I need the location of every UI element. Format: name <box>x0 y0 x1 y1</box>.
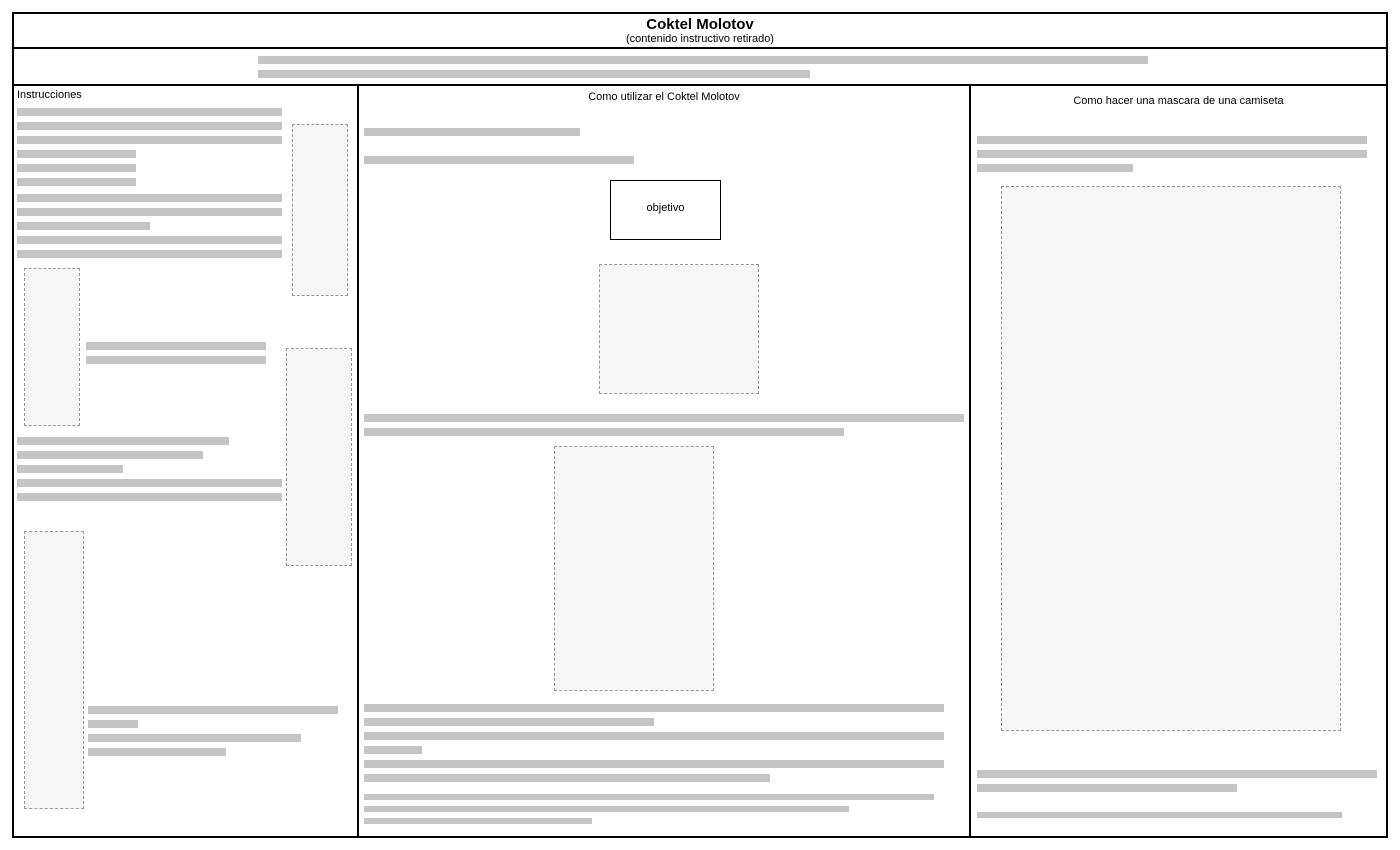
panel: right column <box>969 84 1388 838</box>
text block placeholder: bottom <box>88 706 338 756</box>
text block placeholder: bottom <box>977 770 1377 792</box>
illustration placeholder: lower diagram <box>554 446 714 691</box>
text block placeholder: footnote <box>364 794 934 824</box>
title block: (contenido instructivo retirado) <box>626 33 774 45</box>
heading: middle column: Como utilizar el Coktel Molotov <box>588 91 740 103</box>
panel: middle column <box>357 84 971 838</box>
illustration placeholder: upper right <box>292 124 348 296</box>
materials panel, text removed <box>12 47 1388 86</box>
illustration placeholder: upper diagram <box>599 264 759 394</box>
illustration placeholder: large figure <box>1001 186 1341 731</box>
labelled target box: objetivo <box>647 202 684 214</box>
labelled target box <box>610 180 721 240</box>
heading: instructions: Instrucciones <box>17 89 82 101</box>
text block placeholder: top <box>17 108 282 186</box>
text block placeholder: beside upper left illustration <box>86 342 266 364</box>
heading: right column: Como hacer una mascara de una camiseta <box>1073 95 1284 107</box>
panel: left column <box>12 84 359 838</box>
text block placeholder: lower <box>364 704 944 782</box>
illustration placeholder: lower left <box>24 531 84 809</box>
title block: Coktel Molotov <box>646 16 754 33</box>
title block <box>12 12 1388 49</box>
text block placeholder: middle <box>17 194 282 258</box>
text block placeholder: note <box>977 812 1342 818</box>
illustration placeholder: middle right <box>286 348 352 566</box>
text block placeholder: intro <box>364 128 634 164</box>
text block placeholder: centre <box>364 414 964 436</box>
illustration placeholder: upper left <box>24 268 80 426</box>
text block placeholder: lower <box>17 437 282 501</box>
text block placeholder: intro <box>977 136 1367 172</box>
